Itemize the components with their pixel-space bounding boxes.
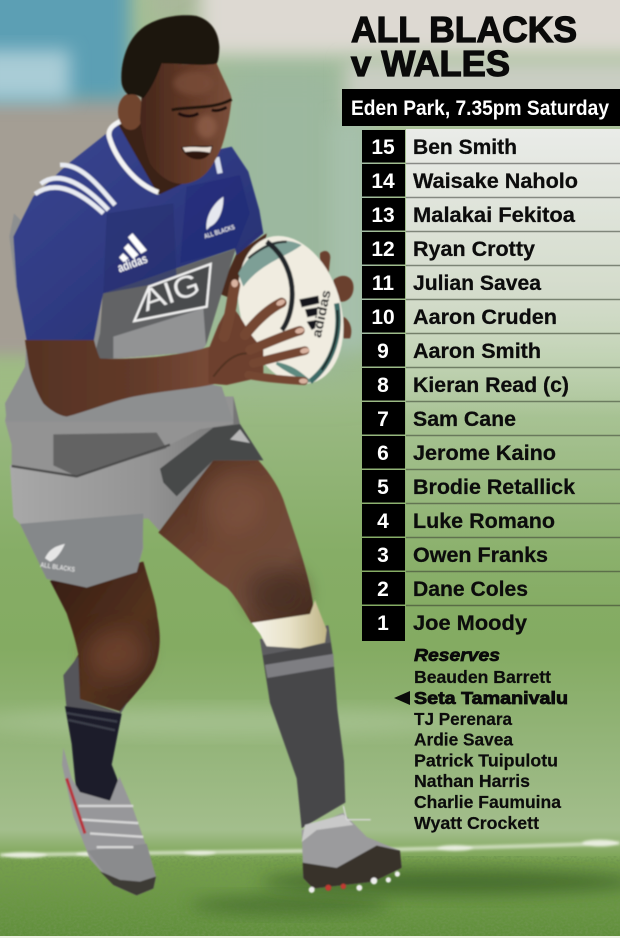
reserves list	[394, 645, 568, 833]
hand	[208, 279, 310, 385]
title: v WALES	[351, 43, 510, 84]
face	[140, 63, 232, 184]
white fade panel	[406, 129, 620, 609]
blue top	[13, 122, 263, 340]
player 12	[362, 232, 535, 264]
player 5: 5	[377, 476, 389, 499]
neck	[115, 100, 187, 217]
player 11: Julian Savea	[413, 272, 541, 295]
shoulder stripes	[35, 165, 115, 213]
player 1: 1	[377, 612, 389, 635]
player 9: 9	[377, 340, 389, 363]
adidas logo: adidas	[116, 252, 149, 275]
knee tape	[252, 600, 327, 648]
player 15: 15	[371, 136, 395, 159]
reserves list: TJ Perenara	[414, 709, 512, 729]
arm	[25, 340, 217, 417]
highlighted reserve with arrow: Seta Tamanivalu	[414, 688, 568, 708]
player 6: Jerome Kaino	[413, 442, 556, 465]
shorts: ALL BLACKS	[40, 562, 76, 574]
player 15: Ben Smith	[413, 136, 517, 159]
player 9: Aaron Smith	[413, 340, 541, 363]
player 3: 3	[377, 544, 389, 567]
player 13	[362, 198, 575, 230]
player 12: Ryan Crotty	[413, 238, 535, 261]
player 3	[362, 538, 548, 570]
player 11: 11	[372, 272, 394, 295]
player 5	[362, 470, 575, 502]
player 8: Kieran Read (c)	[413, 374, 569, 397]
AIG logo	[134, 264, 211, 321]
player 7: 7	[377, 408, 389, 431]
adidas logo	[108, 230, 152, 275]
far forearm and fingers	[218, 233, 353, 338]
collar	[109, 121, 158, 192]
player 9	[362, 334, 541, 366]
AIG logo: AIG	[137, 267, 204, 318]
near sock	[260, 625, 345, 828]
rugby ball	[221, 223, 361, 397]
rugby ball: adidas	[309, 289, 334, 339]
far leg	[50, 562, 160, 801]
player 8: 8	[377, 374, 389, 397]
near boot	[302, 806, 402, 893]
player 10	[362, 300, 557, 332]
player upper body	[5, 15, 361, 422]
player 7: Sam Cane	[413, 408, 516, 431]
player 13: 13	[371, 204, 395, 227]
player 7	[362, 402, 516, 434]
ear	[118, 93, 143, 130]
title: ALL BLACKS	[351, 9, 577, 50]
reserves list: Ardie Savea	[414, 730, 513, 750]
player 6: 6	[377, 442, 389, 465]
player 13: Malakai Fekitoa	[413, 204, 575, 227]
player 10: 10	[371, 306, 395, 329]
venue bar	[342, 89, 620, 126]
reserves list: Patrick Tuipulotu	[414, 750, 558, 770]
player 12: 12	[371, 238, 395, 261]
title	[351, 9, 577, 84]
player 1	[362, 606, 527, 641]
jersey hem	[5, 397, 233, 476]
player 4: Luke Romano	[413, 510, 555, 533]
player lower body	[5, 15, 402, 895]
all blacks fern: ALL BLACKS	[203, 224, 236, 241]
player 3: Owen Franks	[413, 544, 548, 567]
reserves list: Charlie Faumuina	[414, 792, 561, 812]
jersey	[5, 121, 263, 422]
player 4: 4	[377, 510, 389, 533]
reserves list: Beauden Barrett	[414, 667, 551, 687]
player 11	[362, 266, 541, 298]
player 2: 2	[377, 578, 389, 601]
player 1: Joe Moody	[413, 612, 527, 635]
row dividers	[406, 164, 620, 606]
side panel	[5, 213, 233, 422]
player 2	[362, 572, 528, 604]
player 4	[362, 504, 555, 536]
player 14: 14	[371, 170, 395, 193]
far boot	[62, 747, 156, 895]
player 15	[362, 130, 517, 162]
shorts	[10, 397, 263, 587]
player 8	[362, 368, 569, 400]
pitch line	[0, 840, 620, 858]
head	[118, 15, 232, 184]
reserves list: Wyatt Crockett	[414, 813, 539, 833]
player 14	[362, 164, 578, 196]
player 10: Aaron Cruden	[413, 306, 557, 329]
player 5: Brodie Retallick	[413, 476, 575, 499]
player 6	[362, 436, 556, 468]
all blacks fern	[203, 197, 236, 241]
team list	[362, 129, 620, 641]
grey chest panel	[93, 248, 236, 360]
near leg	[158, 455, 313, 624]
hair	[121, 15, 219, 98]
reserves list: Nathan Harris	[414, 771, 530, 791]
reserves heading: Reserves	[414, 645, 500, 665]
player 14: Waisake Naholo	[413, 170, 578, 193]
player 2: Dane Coles	[413, 578, 528, 601]
